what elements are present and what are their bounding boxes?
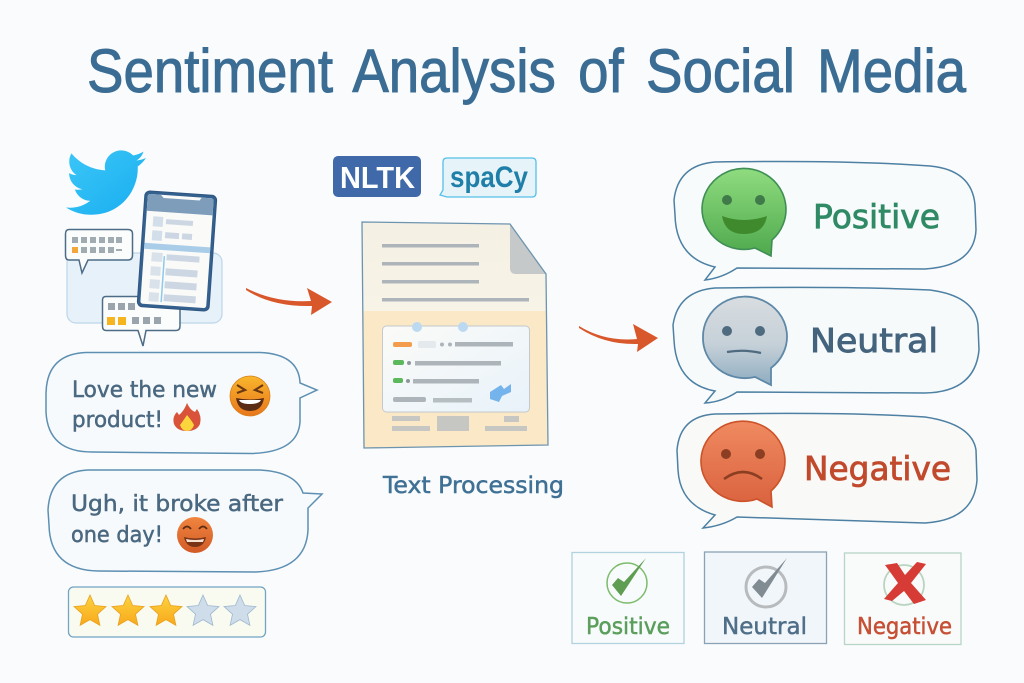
footer blocks (392, 416, 527, 431)
icon: positive face (702, 168, 786, 256)
panel: social media sources (66, 150, 222, 346)
legend card: negative (844, 553, 961, 644)
text lines (382, 244, 529, 302)
speech bubble: positive (674, 162, 976, 280)
icon: grey check (746, 558, 787, 607)
text: negative: Negative (804, 449, 951, 488)
icon: fire (173, 403, 201, 431)
document: text processing (362, 222, 548, 448)
icon: neutral face (703, 297, 787, 385)
icon: laughing emoji (230, 376, 270, 416)
icon: negative face (701, 421, 785, 507)
icon: phone (137, 191, 217, 311)
arrow: processing to sentiment (579, 324, 658, 352)
text: neutral label: Neutral (722, 614, 807, 640)
icon: red cross (884, 562, 926, 605)
text: text processing label: Text Processing (382, 473, 564, 499)
icon: twitter bird (66, 150, 146, 215)
speech bubble: negative (677, 413, 977, 528)
text: negative label: Negative (857, 614, 952, 640)
icon: smiling emoji (177, 517, 213, 553)
chat bubble: top (66, 230, 132, 273)
text: positive label: Positive (586, 614, 670, 640)
speech bubble: ugh it broke (48, 470, 322, 572)
legend card: neutral (704, 552, 826, 644)
text: ugh it broke after: Ugh, it broke after (71, 492, 284, 517)
check badges (412, 322, 422, 332)
chat bubble: bottom (102, 296, 180, 346)
text: love the new: Love the new (72, 378, 217, 403)
text: neutral: Neutral (810, 321, 938, 360)
arrow: sources to processing (246, 288, 332, 315)
text: positive: Positive (813, 197, 940, 236)
speech bubble: neutral (673, 287, 979, 403)
logo: spaCy: spaCy (450, 161, 528, 194)
logo: NLTK: NLTK (340, 160, 416, 195)
star rating (68, 587, 266, 637)
icon: green check (607, 558, 647, 603)
backing panel (67, 253, 222, 323)
legend card: positive (572, 552, 684, 644)
text: one day: one day! (71, 523, 163, 548)
speech bubble: love the new product (46, 352, 317, 454)
inner results card (382, 326, 530, 412)
text: product: product! (72, 408, 163, 433)
